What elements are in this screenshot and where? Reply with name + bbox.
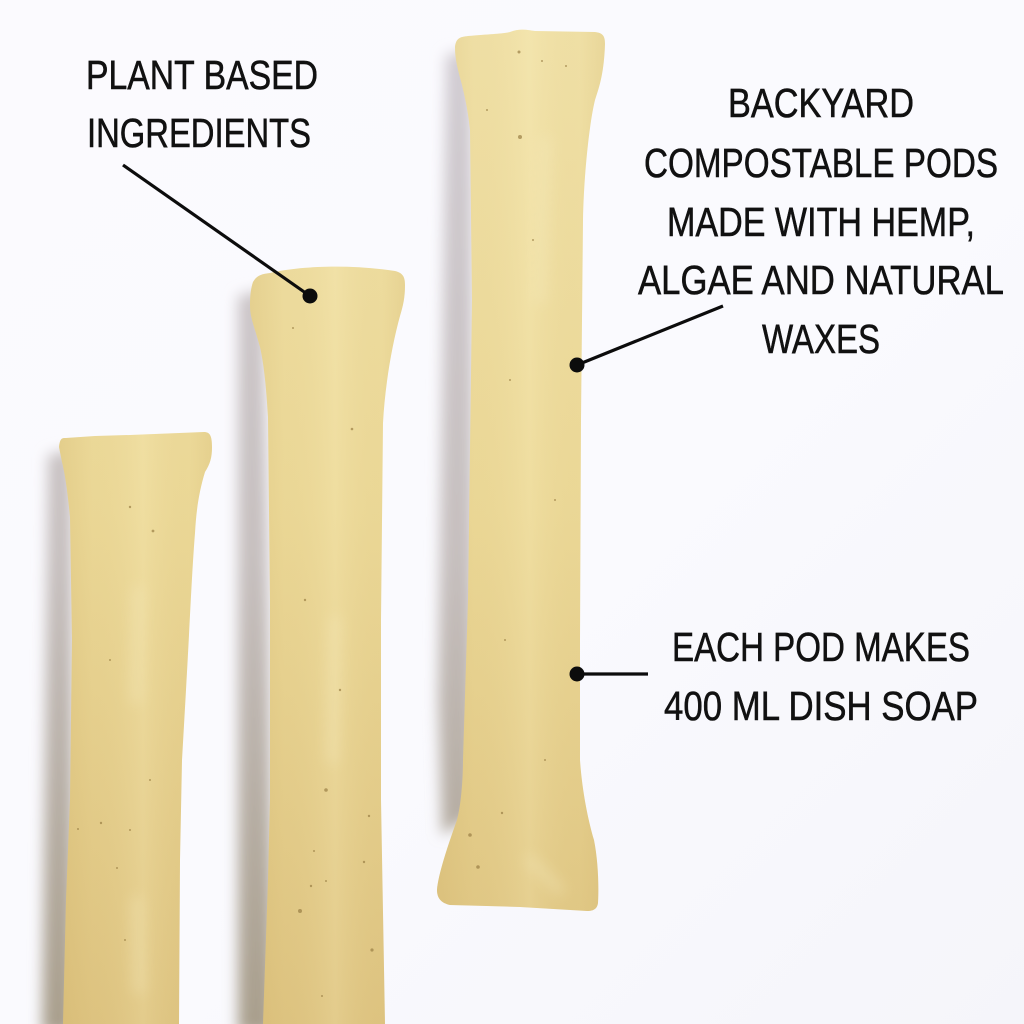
pod specks bbox=[77, 50, 567, 997]
pod shadows bbox=[42, 50, 474, 1024]
label: backyard compostable pods bbox=[638, 80, 1004, 362]
pod highlights bbox=[136, 140, 560, 990]
arrow: plant based ingredients to pod bbox=[123, 165, 318, 304]
label: each pod makes 400 ml dish soap bbox=[664, 624, 978, 729]
middle pod bbox=[250, 267, 405, 1024]
arrow: each pod makes to pod bbox=[570, 666, 648, 682]
label: backyard compostable pods: BACKYARD bbox=[728, 80, 914, 126]
label: plant based ingredients: PLANT BASED bbox=[86, 52, 318, 98]
arrow: compostable pods to pod bbox=[570, 306, 723, 372]
right pod bbox=[437, 30, 605, 911]
label: plant based ingredients bbox=[86, 52, 318, 156]
label: plant based ingredients: INGREDIENTS bbox=[87, 110, 311, 156]
label: backyard compostable pods: WAXES bbox=[762, 316, 880, 362]
label: each pod makes 400 ml dish soap: 400 ML DISH SOAP bbox=[664, 683, 978, 729]
left pod bbox=[59, 432, 212, 1024]
